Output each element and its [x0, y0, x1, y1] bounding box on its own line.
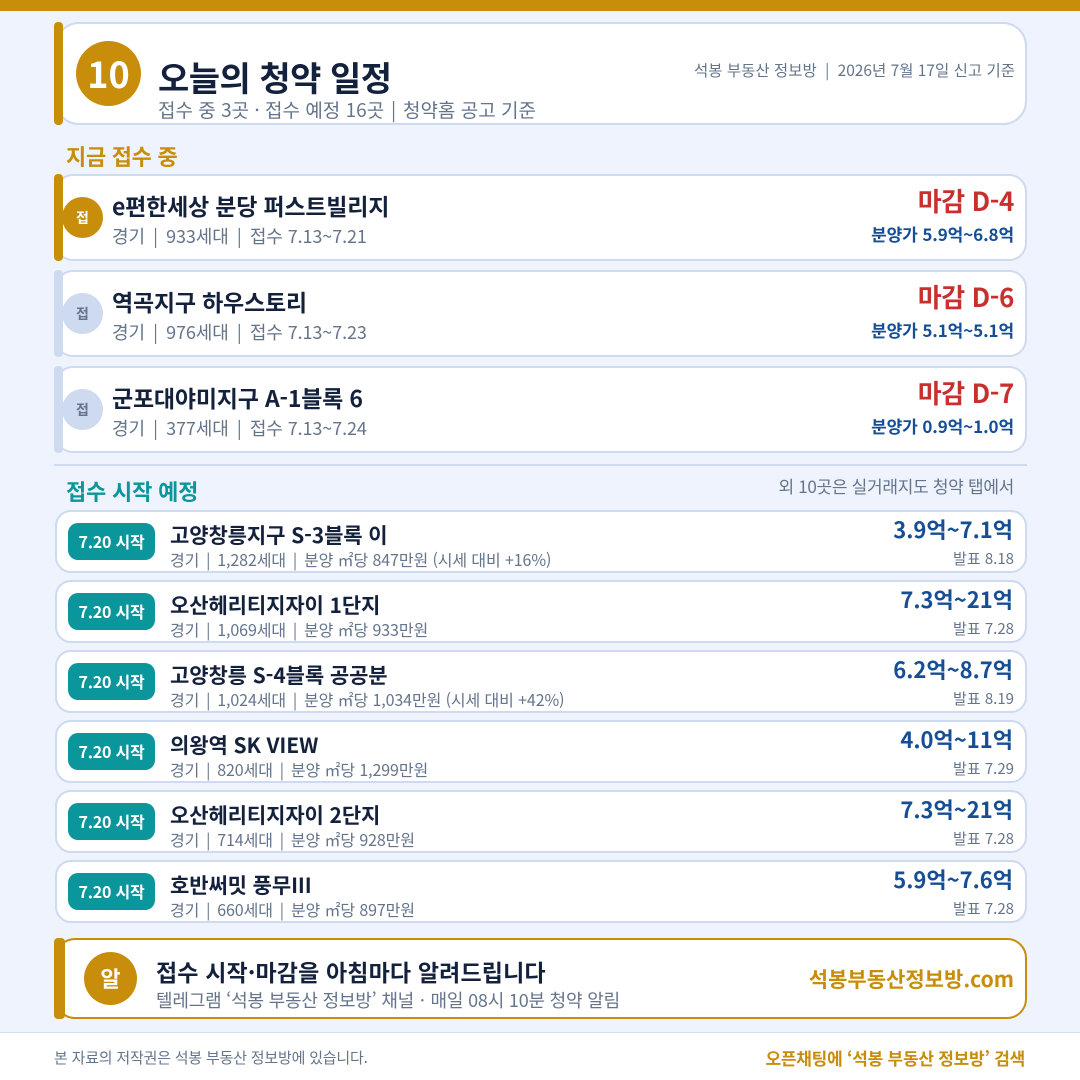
callout headline: 접수 시작·마감을 아침마다 알려드립니다: [156, 954, 546, 988]
panel: upcoming item 4: [55, 720, 1027, 783]
upcoming item 3 start badge: [68, 663, 155, 700]
panel: open item 3: [54, 366, 1027, 453]
upcoming item 6 price: 5.9억~7.6억: [893, 863, 1013, 895]
heading: open now: 지금 접수 중: [66, 140, 177, 172]
upcoming item 4 announcement: 발표 7.29: [953, 758, 1014, 779]
icon: alert badge: [84, 952, 137, 1005]
header accent bar: [54, 22, 63, 125]
panel: upcoming item 6: [55, 860, 1027, 923]
note: other listings: 외 10곳은 실거래지도 청약 탭에서: [778, 473, 1014, 498]
footer: [0, 1032, 1080, 1080]
upcoming item 1 start badge: 7.20 시작: [78, 529, 145, 553]
accent bar: [54, 366, 63, 453]
upcoming item 6 start badge: 7.20 시작: [78, 879, 145, 903]
upcoming item 5 start badge: 7.20 시작: [78, 809, 145, 833]
icon: status badge: 접: [76, 400, 89, 420]
upcoming item 2 name: 오산헤리티지자이 1단지: [170, 590, 380, 620]
card background: [55, 174, 1027, 261]
panel: header: [54, 22, 1027, 125]
upcoming item 6 start badge: [68, 873, 155, 910]
upcoming item 6 name: 호반써밋 풍무III: [170, 870, 312, 900]
upcoming item 2 start badge: 7.20 시작: [78, 599, 145, 623]
upcoming item 6 details: 경기 | 660세대 | 분양 ㎡당 897만원: [170, 897, 415, 921]
panel: upcoming item 5: [55, 790, 1027, 853]
top accent band: [0, 0, 1080, 11]
upcoming item 3 details: 경기 | 1,024세대 | 분양 ㎡당 1,034만원 (시세 대비 +42%): [170, 687, 564, 711]
icon: status badge: [62, 197, 103, 238]
upcoming item 1 name: 고양창릉지구 S-3블록 이: [170, 520, 388, 550]
deadline: 마감 D-7: [918, 374, 1014, 411]
details: 경기 | 976세대 | 접수 7.13~7.23: [112, 319, 367, 345]
details: 경기 | 933세대 | 접수 7.13~7.21: [112, 223, 367, 249]
price: 분양가 5.9억~6.8억: [871, 221, 1014, 246]
callout background: [55, 938, 1027, 1019]
upcoming item 5 start badge: [68, 803, 155, 840]
callout detail: 텔레그램 ‘석봉 부동산 정보방’ 채널 · 매일 08시 10분 청약 알림: [156, 987, 620, 1013]
upcoming item 1 announcement: 발표 8.18: [953, 548, 1014, 569]
panel: notification callout: [54, 938, 1027, 1019]
callout accent bar: [54, 938, 65, 1019]
heading: upcoming: 접수 시작 예정: [66, 475, 198, 507]
panel: upcoming item 3: [55, 650, 1027, 713]
icon: alert badge: 알: [100, 962, 121, 994]
price: 분양가 0.9억~1.0억: [871, 413, 1014, 438]
panel: upcoming item 1: [55, 510, 1027, 573]
copyright: 본 자료의 저작권은 석봉 부동산 정보방에 있습니다.: [54, 1047, 368, 1068]
upcoming item 2 announcement: 발표 7.28: [953, 618, 1014, 639]
name: 군포대야미지구 A-1블록 6: [112, 380, 363, 414]
icon: count badge: [76, 41, 141, 106]
deadline: 마감 D-6: [918, 278, 1014, 315]
upcoming item 3 announcement: 발표 8.19: [953, 688, 1014, 709]
panel: open item 2: [54, 270, 1027, 357]
upcoming item 6 announcement: 발표 7.28: [953, 898, 1014, 919]
upcoming item 1 start badge: [68, 523, 155, 560]
name: e편한세상 분당 퍼스트빌리지: [112, 188, 389, 222]
website: 석봉부동산정보방.com: [809, 964, 1014, 994]
accent bar: [54, 270, 63, 357]
upcoming item 2 details: 경기 | 1,069세대 | 분양 ㎡당 933만원: [170, 617, 428, 641]
panel: upcoming item 2: [55, 580, 1027, 643]
upcoming item 1 price: 3.9억~7.1억: [893, 513, 1013, 545]
upcoming item 2 price: 7.3억~21억: [900, 583, 1013, 615]
accent bar: [54, 174, 63, 261]
upcoming item 4 name: 의왕역 SK VIEW: [170, 730, 318, 760]
icon: status badge: 접: [76, 304, 89, 324]
name: 역곡지구 하우스토리: [112, 284, 307, 318]
source and date: 석봉 부동산 정보방 | 2026년 7월 17일 신고 기준: [694, 59, 1015, 81]
upcoming item 1 details: 경기 | 1,282세대 | 분양 ㎡당 847만원 (시세 대비 +16%): [170, 547, 551, 571]
upcoming item 5 name: 오산헤리티지자이 2단지: [170, 800, 380, 830]
open chat prompt: 오픈채팅에 ‘석봉 부동산 정보방’ 검색: [766, 1045, 1025, 1070]
upcoming item 3 price: 6.2억~8.7억: [893, 653, 1013, 685]
upcoming item 4 start badge: 7.20 시작: [78, 739, 145, 763]
upcoming item 2 start badge: [68, 593, 155, 630]
icon: status badge: [62, 293, 103, 334]
card background: [55, 366, 1027, 453]
upcoming item 5 price: 7.3억~21억: [900, 793, 1013, 825]
header subtitle: 접수 중 3곳 · 접수 예정 16곳 | 청약홈 공고 기준: [158, 96, 536, 123]
upcoming item 4 start badge: [68, 733, 155, 770]
price: 분양가 5.1억~5.1억: [871, 317, 1014, 342]
card background: [55, 270, 1027, 357]
upcoming item 4 details: 경기 | 820세대 | 분양 ㎡당 1,299만원: [170, 757, 428, 781]
upcoming item 5 announcement: 발표 7.28: [953, 828, 1014, 849]
header card background: [55, 22, 1027, 125]
deadline: 마감 D-4: [918, 182, 1014, 219]
panel: open item 1: [54, 174, 1027, 261]
upcoming item 3 name: 고양창릉 S-4블록 공공분: [170, 660, 388, 690]
upcoming item 3 start badge: 7.20 시작: [78, 669, 145, 693]
upcoming item 4 price: 4.0억~11억: [900, 723, 1013, 755]
icon: status badge: 접: [76, 208, 89, 228]
icon: status badge: [62, 389, 103, 430]
icon: count badge: 10: [87, 47, 130, 99]
details: 경기 | 377세대 | 접수 7.13~7.24: [112, 415, 367, 441]
title: 오늘의 청약 일정: [158, 52, 392, 101]
upcoming item 5 details: 경기 | 714세대 | 분양 ㎡당 928만원: [170, 827, 415, 851]
